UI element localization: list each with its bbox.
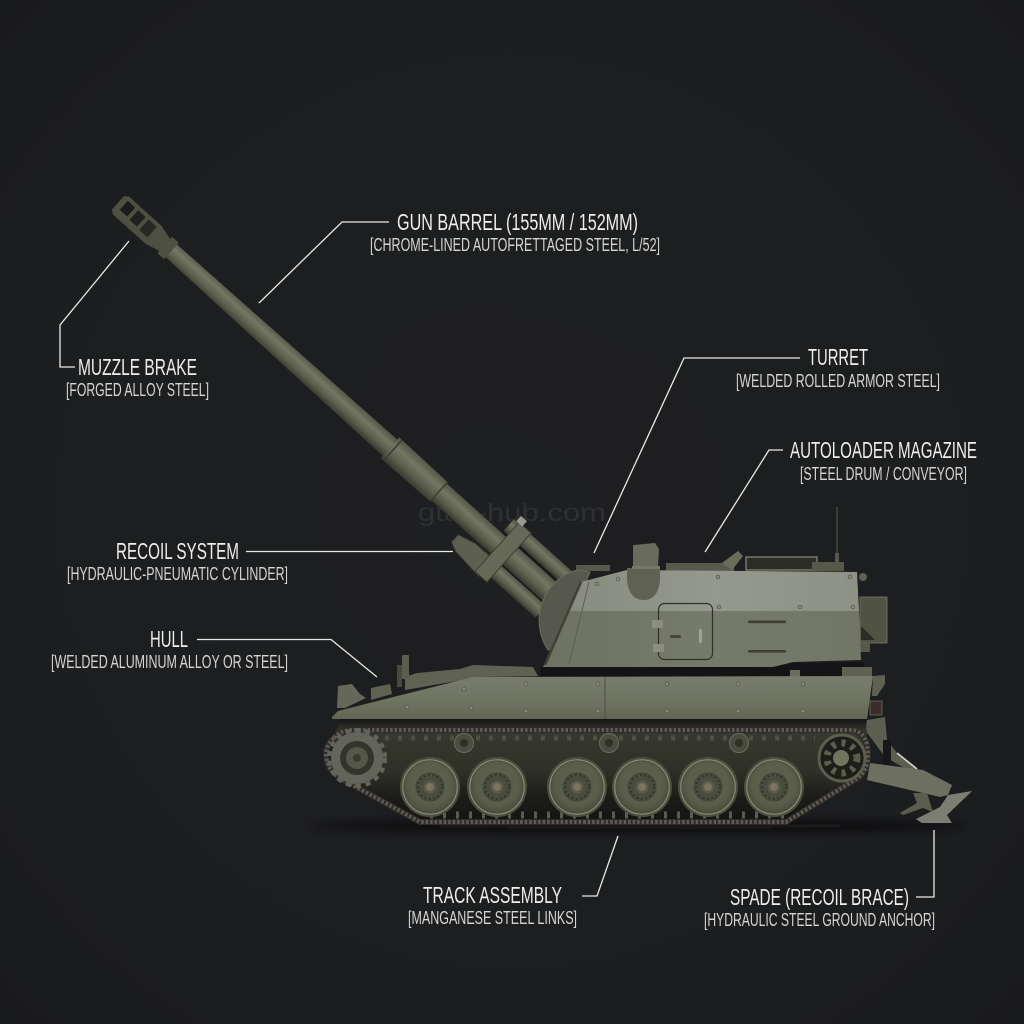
turret roof equipment [576, 507, 844, 571]
howitzer vehicle [94, 175, 972, 823]
leader line: hull [197, 640, 377, 677]
turret lower plate [543, 611, 861, 667]
material: muzzle brake: [FORGED ALLOY STEEL] [66, 379, 209, 400]
material: track assembly: [MANGANESE STEEL LINKS] [408, 907, 577, 928]
turret ring [540, 662, 864, 678]
label: track assembly [408, 836, 618, 928]
road wheels [400, 757, 804, 817]
cradle wedge [447, 531, 494, 576]
label: autoloader magazine [705, 437, 977, 552]
spade arm [867, 763, 952, 797]
heading: recoil system: RECOIL SYSTEM [116, 538, 239, 564]
label: recoil system [67, 538, 453, 584]
leader line: spade [916, 830, 934, 897]
leader line: muzzle brake [60, 241, 129, 367]
heading: turret: TURRET [808, 344, 868, 370]
turret upper plate [569, 570, 859, 611]
hull rivets [405, 682, 805, 713]
gun barrel assembly [94, 175, 580, 623]
label: gun barrel [259, 209, 660, 303]
main barrel tube [160, 239, 397, 456]
clamp band [475, 522, 531, 582]
material: gun barrel: [CHROME-LINED AUTOFRETTAGED STEEL, L/52] [370, 234, 660, 255]
muzzle brake [110, 194, 173, 254]
track lower teeth [430, 812, 790, 818]
watermark: gtac-hub.com [418, 499, 606, 527]
drive sprocket [329, 730, 385, 786]
spade strut [865, 717, 918, 775]
turret rivets [595, 575, 855, 609]
spade blade [916, 791, 972, 823]
label: spade [704, 830, 935, 930]
track assembly [326, 730, 868, 822]
material: hull: [WELDED ALUMINUM ALLOY OR STEEL] [51, 651, 288, 672]
label: hull [51, 626, 377, 677]
grab handles [748, 620, 786, 653]
leader line: recoil system [246, 550, 453, 552]
hull [332, 675, 885, 719]
track upper guide teeth [385, 736, 815, 740]
barrel sleeve [381, 437, 448, 502]
material: recoil system: [HYDRAULIC-PNEUMATIC CYLINDER] [67, 563, 288, 584]
leader line: autoloader magazine [705, 450, 783, 552]
label: muzzle brake [60, 241, 209, 400]
rear hull bracket [872, 675, 885, 696]
spade fin [900, 793, 933, 815]
mantlet [539, 570, 590, 650]
running gear [326, 719, 868, 822]
muzzle collar [157, 237, 179, 259]
lower hull shadow [334, 719, 868, 822]
leader line: turret [594, 358, 800, 553]
idler wheel [819, 735, 865, 781]
return rollers [454, 734, 748, 752]
heading: gun barrel: GUN BARREL (155MM / 152MM) [397, 209, 638, 235]
heading: track assembly: TRACK ASSEMBLY [423, 882, 562, 908]
label: turret [594, 344, 940, 553]
commander cupola [627, 543, 660, 600]
rear stowage rack [859, 573, 887, 652]
recoil cylinders [475, 519, 575, 618]
hull top deck [337, 655, 872, 708]
ground shadow [310, 822, 970, 830]
heading: muzzle brake: MUZZLE BRAKE [78, 354, 197, 380]
heading: hull: HULL [150, 626, 188, 652]
spade [865, 717, 972, 823]
leader line: track assembly [582, 836, 618, 896]
turret [543, 543, 861, 667]
side hatch door [652, 604, 712, 660]
heading: spade: SPADE (RECOIL BRACE) [730, 884, 909, 910]
leader line: gun barrel [259, 222, 389, 303]
